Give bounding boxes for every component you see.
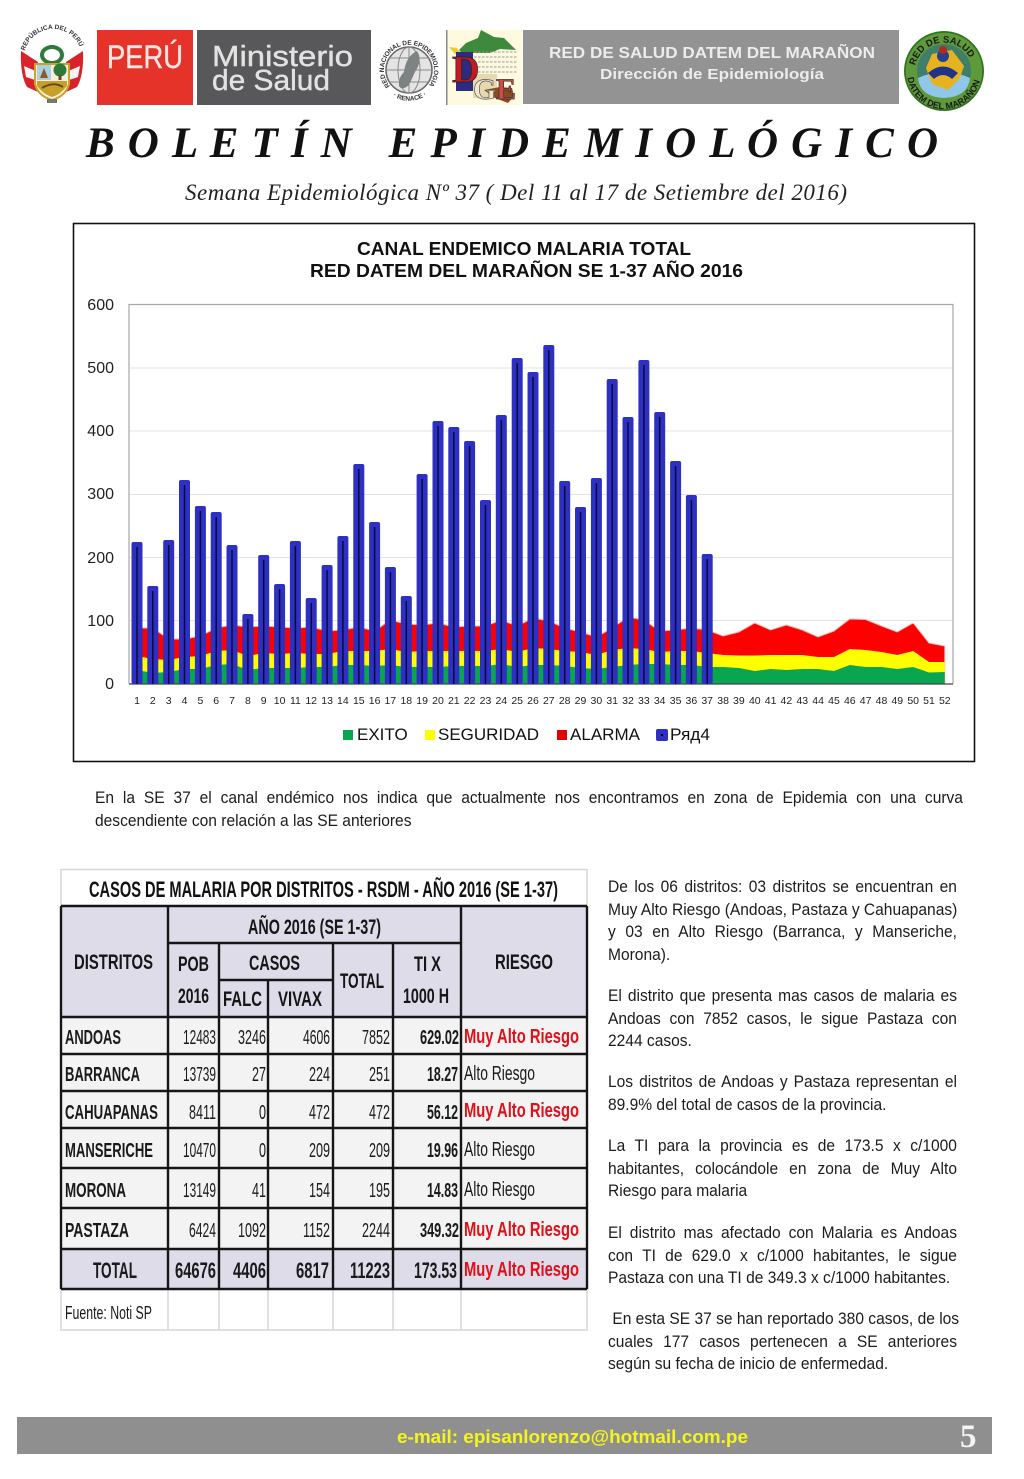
logo: DGE map bbox=[446, 30, 522, 106]
x axis labels: 28 bbox=[559, 695, 571, 707]
x axis labels: 50 bbox=[907, 695, 919, 707]
x axis labels: 11 bbox=[290, 695, 301, 707]
x axis labels: 10 bbox=[274, 695, 286, 707]
row: Manseriche: 209 bbox=[309, 1140, 330, 1162]
text block: most cases: Andoas con 7852 casos, le sigue Pastaza con bbox=[608, 1009, 957, 1028]
x axis labels: 45 bbox=[828, 695, 840, 707]
chart title: CANAL ENDEMICO MALARIA TOTAL bbox=[357, 239, 691, 259]
table header cells: 1000 H bbox=[403, 985, 449, 1008]
x axis labels: 41 bbox=[765, 695, 777, 707]
x axis labels: 48 bbox=[876, 695, 887, 707]
text block: weekly cases: En esta SE 37 se han reportado 380 casos, de los bbox=[612, 1309, 959, 1328]
logo: DGE map: D bbox=[452, 49, 479, 91]
row: Morona: 41 bbox=[252, 1180, 266, 1202]
x axis labels: 5 bbox=[197, 695, 203, 707]
row: Andoas: 3246 bbox=[238, 1027, 266, 1049]
x axis labels: 4 bbox=[182, 695, 188, 707]
text block: provincial incidence: Riesgo para malaria bbox=[608, 1181, 747, 1200]
x axis labels: 35 bbox=[670, 695, 682, 707]
logo: PERÚ red block: PERÚ bbox=[107, 39, 183, 75]
x axis labels: 49 bbox=[891, 695, 903, 707]
row: Manseriche: 209 bbox=[369, 1140, 390, 1162]
text block: district risk summary: y 03 en Alto Riesgo (Barranca, y Manseriche, bbox=[608, 922, 957, 941]
text block: chart commentary: descendiente con relación a las SE anteriores bbox=[95, 811, 411, 830]
logo: Peru coat of arms bbox=[20, 24, 84, 103]
title: B O L E T Í N E P I D E M I O L Ó G I C O bbox=[85, 120, 938, 167]
row: Cahuapanas: CAHUAPANAS bbox=[65, 1102, 158, 1124]
text block: provincial share bbox=[608, 1072, 957, 1114]
x axis labels: 46 bbox=[844, 695, 856, 707]
text block: district risk summary: Morona). bbox=[608, 945, 670, 964]
row: Total bbox=[93, 1258, 579, 1283]
area: exito bbox=[137, 664, 945, 684]
logo: Peru coat of arms: REPÚBLICA DEL PERÚ bbox=[20, 24, 84, 50]
table header cells: 2016 bbox=[178, 985, 209, 1008]
row: Total: 173.53 bbox=[414, 1258, 457, 1283]
y axis labels bbox=[87, 297, 114, 693]
logo: Ministerio de Salud bbox=[197, 30, 371, 105]
row: Barranca: 18.27 bbox=[427, 1064, 458, 1086]
x axis labels: 52 bbox=[939, 695, 951, 707]
y axis labels: 200 bbox=[87, 550, 114, 567]
logo: Red de Salud Datem del Marañon seal: RED DE SALUD bbox=[909, 36, 974, 65]
y axis labels: 0 bbox=[105, 676, 114, 693]
header banner: red de salud bbox=[523, 30, 899, 104]
x axis labels: 26 bbox=[527, 695, 539, 707]
logo: Ministerio de Salud: de Salud bbox=[212, 65, 330, 97]
x axis labels: 12 bbox=[305, 695, 317, 707]
header banner: red de salud: RED DE SALUD DATEM DEL MARAÑON bbox=[549, 42, 875, 62]
text block: chart commentary: En la SE 37 el canal endémico nos indica que actualmente nos encontramos en zona de Epidemia con una curva bbox=[95, 788, 963, 807]
row: Pastaza: 349.32 bbox=[420, 1220, 459, 1242]
row: Cahuapanas: 56.12 bbox=[427, 1102, 458, 1124]
chart title: RED DATEM DEL MARAÑON SE 1-37 AÑO 2016 bbox=[310, 260, 743, 281]
row: Morona: 195 bbox=[369, 1180, 390, 1202]
row: Cahuapanas: 472 bbox=[309, 1102, 330, 1124]
row: Total: 6817 bbox=[296, 1258, 329, 1283]
chart legend: ALARMA bbox=[570, 725, 641, 744]
row: Pastaza: PASTAZA bbox=[65, 1220, 129, 1242]
x axis labels: 34 bbox=[654, 695, 666, 707]
x axis labels: 44 bbox=[812, 695, 824, 707]
row: Total: 4406 bbox=[233, 1258, 266, 1283]
row: Barranca: 13739 bbox=[183, 1064, 216, 1086]
chart legend: Ряд4 bbox=[670, 725, 710, 744]
row: Total: TOTAL bbox=[93, 1258, 137, 1283]
row: Andoas: 7852 bbox=[362, 1027, 390, 1049]
footer email: e-mail: episanlorenzo@hotmail.com.pe bbox=[397, 1427, 748, 1447]
row: Pastaza: 1092 bbox=[238, 1220, 266, 1242]
x axis labels: 37 bbox=[701, 695, 713, 707]
row: Pastaza: Muy Alto Riesgo bbox=[464, 1219, 579, 1241]
row: Andoas bbox=[65, 1026, 579, 1049]
panel: endemic channel chart bbox=[74, 224, 974, 762]
x axis labels: 25 bbox=[511, 695, 523, 707]
row: Pastaza bbox=[65, 1219, 579, 1242]
text block: district risk summary: Muy Alto Riesgo (Andoas, Pastaza y Cahuapanas) bbox=[608, 900, 957, 919]
row: Andoas: Muy Alto Riesgo bbox=[464, 1026, 579, 1048]
text block: most cases: El distrito que presenta mas casos de malaria es bbox=[608, 986, 957, 1005]
x axis labels: 36 bbox=[686, 695, 697, 707]
text block: provincial share: 89.9% del total de casos de la provincia. bbox=[608, 1095, 886, 1114]
table header cells: AÑO 2016 (SE 1-37) bbox=[248, 916, 381, 939]
row: Andoas: 12483 bbox=[183, 1027, 216, 1049]
x axis labels: 13 bbox=[321, 695, 333, 707]
logo: RENACE network globe: RED NACIONAL DE EPIDEMIOLOGIA bbox=[380, 40, 438, 88]
logo: DGE map: G bbox=[473, 73, 496, 106]
row: Cahuapanas: Muy Alto Riesgo bbox=[464, 1100, 579, 1122]
x axis labels: 42 bbox=[781, 695, 792, 707]
x axis labels: 40 bbox=[749, 695, 761, 707]
text block: district risk summary: De los 06 distritos: 03 distritos se encuentran en bbox=[608, 877, 957, 896]
x axis labels: 33 bbox=[638, 695, 650, 707]
logo: Red de Salud Datem del Marañon seal bbox=[904, 31, 984, 111]
table source note: Fuente: Noti SP bbox=[65, 1303, 152, 1323]
text block: provincial incidence bbox=[608, 1136, 957, 1200]
x axis labels: 20 bbox=[432, 695, 444, 707]
row: Pastaza: 6424 bbox=[189, 1220, 216, 1242]
y axis labels: 600 bbox=[87, 297, 114, 314]
x axis labels: 16 bbox=[369, 695, 381, 707]
row: Barranca: BARRANCA bbox=[65, 1064, 140, 1086]
x axis labels: 47 bbox=[860, 695, 872, 707]
text block: most affected district bbox=[608, 1223, 957, 1287]
x axis labels: 6 bbox=[213, 695, 219, 707]
row: Total: Muy Alto Riesgo bbox=[464, 1259, 579, 1281]
row: Cahuapanas: 8411 bbox=[189, 1102, 216, 1124]
x axis labels: 21 bbox=[448, 695, 460, 707]
logo: Ministerio de Salud: Ministerio bbox=[212, 41, 353, 73]
text block: most cases: 2244 casos. bbox=[608, 1031, 692, 1050]
table title: CASOS DE MALARIA POR DISTRITOS - RSDM - AÑO 2016 (SE 1-37) bbox=[89, 877, 558, 902]
row: Barranca: 251 bbox=[369, 1064, 390, 1086]
table header cells: FALC bbox=[223, 988, 262, 1011]
row: Morona: 14.83 bbox=[427, 1180, 458, 1202]
x axis labels: 24 bbox=[495, 695, 507, 707]
x axis labels: 43 bbox=[796, 695, 808, 707]
text block: weekly cases: cuales 177 casos pertenecen a SE anteriores bbox=[608, 1332, 957, 1351]
chart legend bbox=[343, 725, 710, 744]
row: Cahuapanas bbox=[65, 1100, 579, 1124]
subtitle: Semana Epidemiológica Nº 37 ( Del 11 al 17 de Setiembre del 2016) bbox=[185, 180, 847, 205]
x axis labels: 7 bbox=[229, 695, 235, 707]
x axis labels: 17 bbox=[385, 695, 396, 707]
x axis labels: 32 bbox=[622, 695, 634, 707]
row: Total: 11223 bbox=[350, 1258, 390, 1283]
logo: DGE map: E bbox=[496, 73, 516, 106]
text block: provincial share: Los distritos de Andoas y Pastaza representan el bbox=[608, 1072, 957, 1091]
y axis labels: 400 bbox=[87, 423, 114, 440]
table header cells: VIVAX bbox=[278, 988, 322, 1011]
table: malaria cases by district bbox=[61, 869, 587, 1330]
x axis labels: 23 bbox=[480, 695, 491, 707]
text block: district risk summary bbox=[608, 877, 957, 964]
x axis labels: 9 bbox=[261, 695, 267, 707]
area: seguridad bbox=[137, 648, 945, 684]
text block: chart commentary bbox=[95, 788, 963, 830]
x axis labels: 39 bbox=[733, 695, 745, 707]
text block: weekly cases bbox=[608, 1309, 959, 1373]
x axis labels: 8 bbox=[245, 695, 251, 707]
chart title bbox=[310, 239, 743, 281]
row: Manseriche bbox=[65, 1139, 535, 1162]
row: Cahuapanas: 472 bbox=[369, 1102, 390, 1124]
row: Barranca: Alto Riesgo bbox=[464, 1063, 535, 1085]
header banner: red de salud: Dirección de Epidemiología bbox=[600, 66, 825, 83]
y axis labels: 100 bbox=[87, 613, 114, 630]
x axis labels: 31 bbox=[606, 695, 618, 707]
bar series: Ряд4 weekly cases bbox=[132, 345, 713, 684]
header logos band bbox=[20, 24, 984, 111]
text block: provincial incidence: La TI para la provincia es de 173.5 x c/1000 bbox=[608, 1136, 957, 1155]
row: Cahuapanas: 0 bbox=[259, 1102, 266, 1124]
row: Manseriche: Alto Riesgo bbox=[464, 1139, 535, 1161]
row: Morona bbox=[65, 1179, 535, 1202]
page number: 5 bbox=[960, 1419, 976, 1455]
text block: weekly cases: según su fecha de inicio de enfermedad. bbox=[608, 1354, 888, 1373]
x axis labels bbox=[134, 695, 951, 707]
x axis labels: 15 bbox=[353, 695, 365, 707]
row: Barranca: 27 bbox=[252, 1064, 266, 1086]
footer bar bbox=[17, 1417, 992, 1455]
table header cells: RIESGO bbox=[495, 951, 553, 974]
y axis labels: 300 bbox=[87, 486, 114, 503]
x axis labels: 3 bbox=[166, 695, 172, 707]
table header cells: TOTAL bbox=[340, 970, 384, 993]
y axis labels: 500 bbox=[87, 360, 114, 377]
text block: most cases bbox=[608, 986, 957, 1050]
row: Pastaza: 2244 bbox=[362, 1220, 390, 1242]
chart legend: SEGURIDAD bbox=[438, 725, 539, 744]
row: Morona: 13149 bbox=[183, 1180, 216, 1202]
x axis labels: 29 bbox=[575, 695, 586, 707]
row: Barranca: 224 bbox=[309, 1064, 330, 1086]
row: Total: 64676 bbox=[175, 1258, 216, 1283]
table header cells bbox=[74, 916, 553, 1011]
table header cells: CASOS bbox=[249, 952, 300, 975]
table header cells: POB bbox=[178, 953, 209, 976]
row: Pastaza: 1152 bbox=[303, 1220, 330, 1242]
row: Manseriche: 19.96 bbox=[427, 1140, 458, 1162]
text block: most affected district: Pastaza con una TI de 349.3 x c/1000 habitantes. bbox=[608, 1268, 950, 1287]
chart legend: EXITO bbox=[357, 725, 408, 744]
row: Barranca bbox=[65, 1063, 535, 1086]
area: alarma bbox=[137, 617, 945, 684]
row: Morona: MORONA bbox=[65, 1180, 126, 1202]
x axis labels: 51 bbox=[923, 695, 935, 707]
table header cells: TI X bbox=[414, 953, 441, 976]
x axis labels: 38 bbox=[717, 695, 729, 707]
x axis labels: 14 bbox=[337, 695, 349, 707]
table header cells: DISTRITOS bbox=[74, 951, 153, 974]
row: Manseriche: 0 bbox=[259, 1140, 266, 1162]
row: Manseriche: MANSERICHE bbox=[65, 1140, 153, 1162]
text block: provincial incidence: habitantes, colocándole en zona de Muy Alto bbox=[608, 1159, 957, 1178]
x axis labels: 19 bbox=[416, 695, 428, 707]
x axis labels: 30 bbox=[591, 695, 602, 707]
row: Morona: Alto Riesgo bbox=[464, 1179, 535, 1201]
text block: most affected district: El distrito mas afectado con Malaria es Andoas bbox=[608, 1223, 957, 1242]
x axis labels: 18 bbox=[400, 695, 412, 707]
row: Morona: 154 bbox=[309, 1180, 330, 1202]
x axis labels: 1 bbox=[134, 695, 140, 707]
row: Andoas: 629.02 bbox=[420, 1027, 459, 1049]
x axis labels: 22 bbox=[464, 695, 476, 707]
row: Andoas: 4606 bbox=[303, 1027, 330, 1049]
text block: most affected district: con TI de 629.0 x c/1000 habitantes, le sigue bbox=[608, 1246, 957, 1265]
x axis labels: 2 bbox=[150, 695, 156, 707]
x axis labels: 27 bbox=[543, 695, 555, 707]
row: Andoas: ANDOAS bbox=[65, 1027, 121, 1049]
logo: Red de Salud Datem del Marañon seal: DATEM DEL MARAÑON bbox=[908, 76, 980, 110]
logo: RENACE network globe: · RENACE · bbox=[394, 93, 425, 101]
row: Manseriche: 10470 bbox=[183, 1140, 216, 1162]
logo: PERÚ red block bbox=[97, 30, 193, 105]
